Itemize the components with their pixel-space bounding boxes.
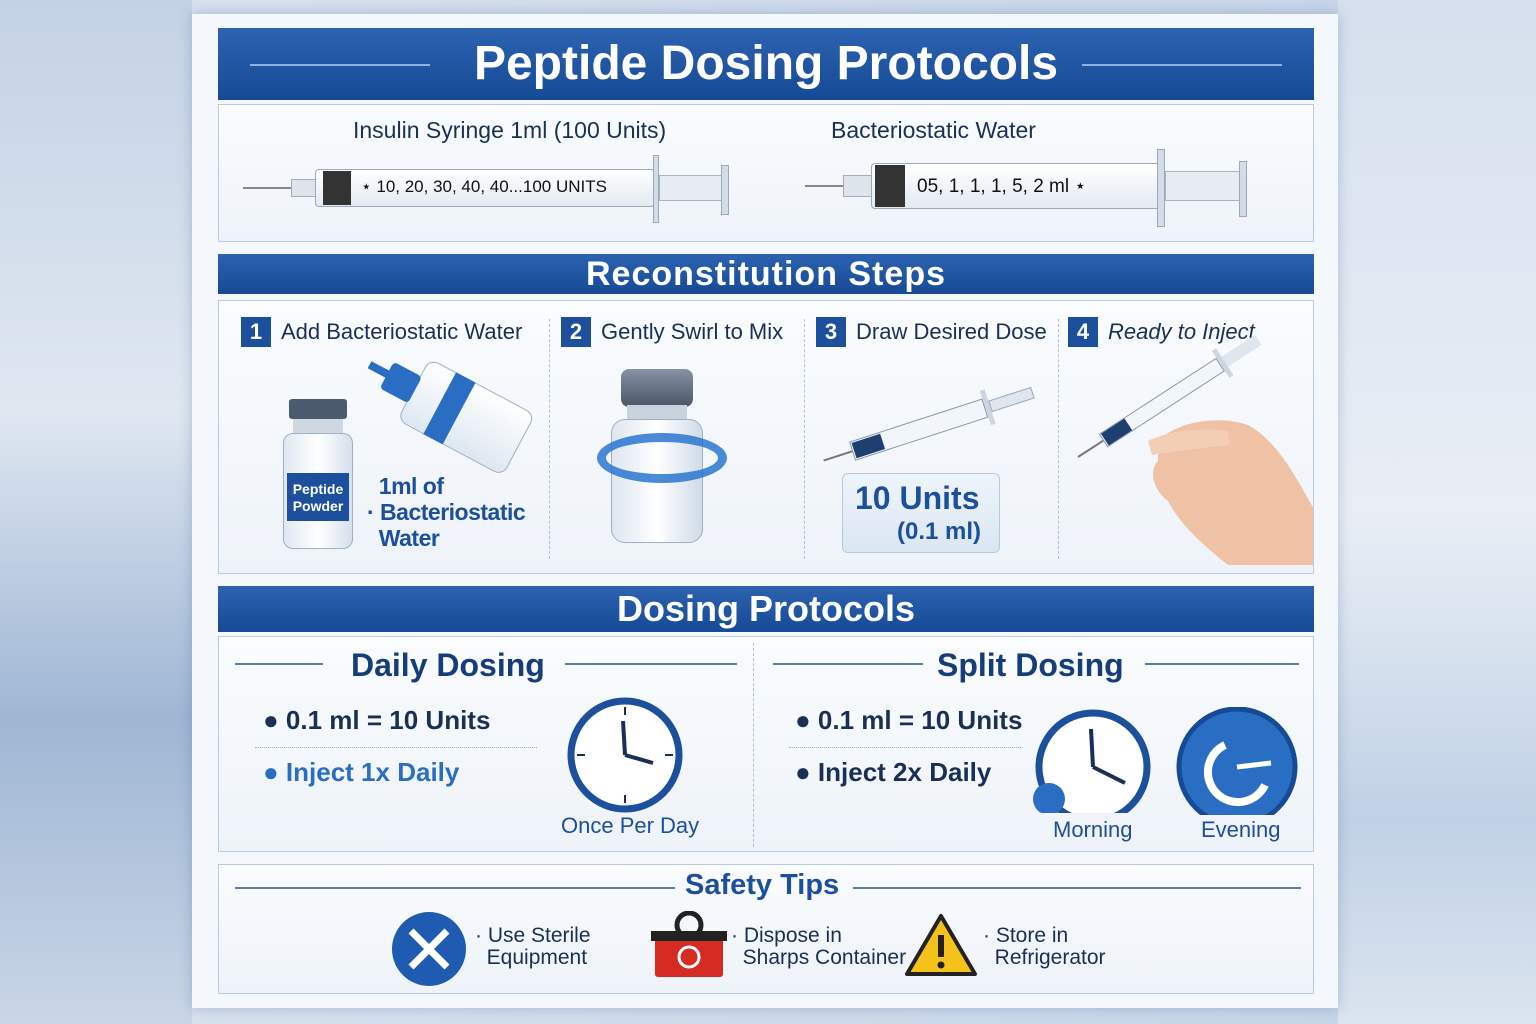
step 1: Add Bacteriostatic Water [281, 319, 522, 344]
split dosing [773, 647, 1299, 842]
step 2: 2 [570, 319, 582, 344]
panel: safety tips: Safety Tips [685, 869, 839, 901]
main card [192, 14, 1338, 1008]
panel: safety tips: · Use Sterile [475, 924, 591, 947]
syringe 1: ⋆ 10, 20, 30, 40, 40...100 UNITS [361, 177, 607, 196]
icon: syringe drawing [823, 386, 1035, 462]
split dosing: Evening [1201, 817, 1281, 842]
step 1: 1 [250, 319, 262, 344]
icon: sharps container [651, 911, 727, 977]
panel: steps [218, 300, 1314, 574]
panel: safety tips: Sharps Container [743, 946, 906, 969]
step 4: 4 [1077, 319, 1089, 344]
panel: safety tips: Refrigerator [995, 946, 1106, 969]
step 4 [1068, 317, 1313, 565]
step 3: 3 [825, 319, 837, 344]
icon: vial peptide powder [283, 399, 353, 549]
icon: sterile [392, 912, 466, 986]
callout: 10 units [842, 473, 1000, 553]
daily dosing: Daily Dosing [351, 647, 545, 683]
step 1 [241, 317, 532, 551]
syringe 2 [805, 149, 1247, 227]
text: 1ml bacteriostatic water: · Bacteriostatic [367, 499, 525, 525]
text: 1ml bacteriostatic water: 1ml of [379, 473, 444, 499]
step 2 [561, 317, 783, 543]
icon: vial peptide powder: Peptide Powder [293, 481, 343, 514]
text: 1ml bacteriostatic water: Water [379, 525, 439, 551]
icon: morning clock [1033, 710, 1150, 813]
syringe 1 [243, 155, 729, 223]
panel: safety tips: · Dispose in [731, 924, 842, 947]
step 3 [816, 317, 1047, 553]
panel: safety tips: · Store in [983, 924, 1068, 947]
panel: safety tips [218, 864, 1314, 994]
heading: dosing protocols: Dosing Protocols [617, 588, 915, 629]
text: 1ml bacteriostatic water [367, 473, 525, 551]
background lab decor [0, 0, 192, 1024]
daily dosing: ● Inject 1x Daily [263, 757, 459, 787]
panel: dosing [218, 636, 1314, 852]
step 2: Gently Swirl to Mix [601, 319, 783, 344]
split dosing: Split Dosing [937, 647, 1124, 683]
title [218, 28, 1314, 100]
heading: dosing protocols [218, 586, 1314, 632]
heading: reconstitution [218, 254, 1314, 294]
panel: syringes [218, 104, 1314, 242]
heading: reconstitution: Reconstitution Steps [586, 255, 946, 293]
daily dosing: ● 0.1 ml = 10 Units [263, 705, 490, 735]
daily dosing: Once Per Day [561, 813, 699, 838]
daily dosing [235, 647, 737, 838]
icon: water bottle pouring [368, 361, 532, 473]
icon: swirling vial [597, 369, 727, 543]
icon: evening clock [1176, 707, 1298, 815]
syringe 2: 05, 1, 1, 1, 5, 2 ml ⋆ [917, 176, 1086, 197]
split dosing: ● Inject 2x Daily [795, 757, 991, 787]
callout: 10 units: (0.1 ml) [897, 518, 981, 545]
icon: clock [568, 698, 682, 812]
syringe 1 label: Insulin Syringe 1ml (100 Units) [353, 117, 666, 143]
title: Peptide Dosing Protocols [474, 37, 1058, 90]
icon: warning [905, 914, 977, 976]
icon: hand with syringe [1078, 335, 1313, 565]
panel: safety tips: Equipment [487, 946, 587, 969]
step 3: Draw Desired Dose [856, 319, 1047, 344]
callout: 10 units: 10 Units [855, 480, 979, 516]
step 4: Ready to Inject [1108, 319, 1255, 344]
split dosing: ● 0.1 ml = 10 Units [795, 705, 1022, 735]
split dosing: Morning [1053, 817, 1132, 842]
syringe 2 label: Bacteriostatic Water [831, 117, 1036, 143]
